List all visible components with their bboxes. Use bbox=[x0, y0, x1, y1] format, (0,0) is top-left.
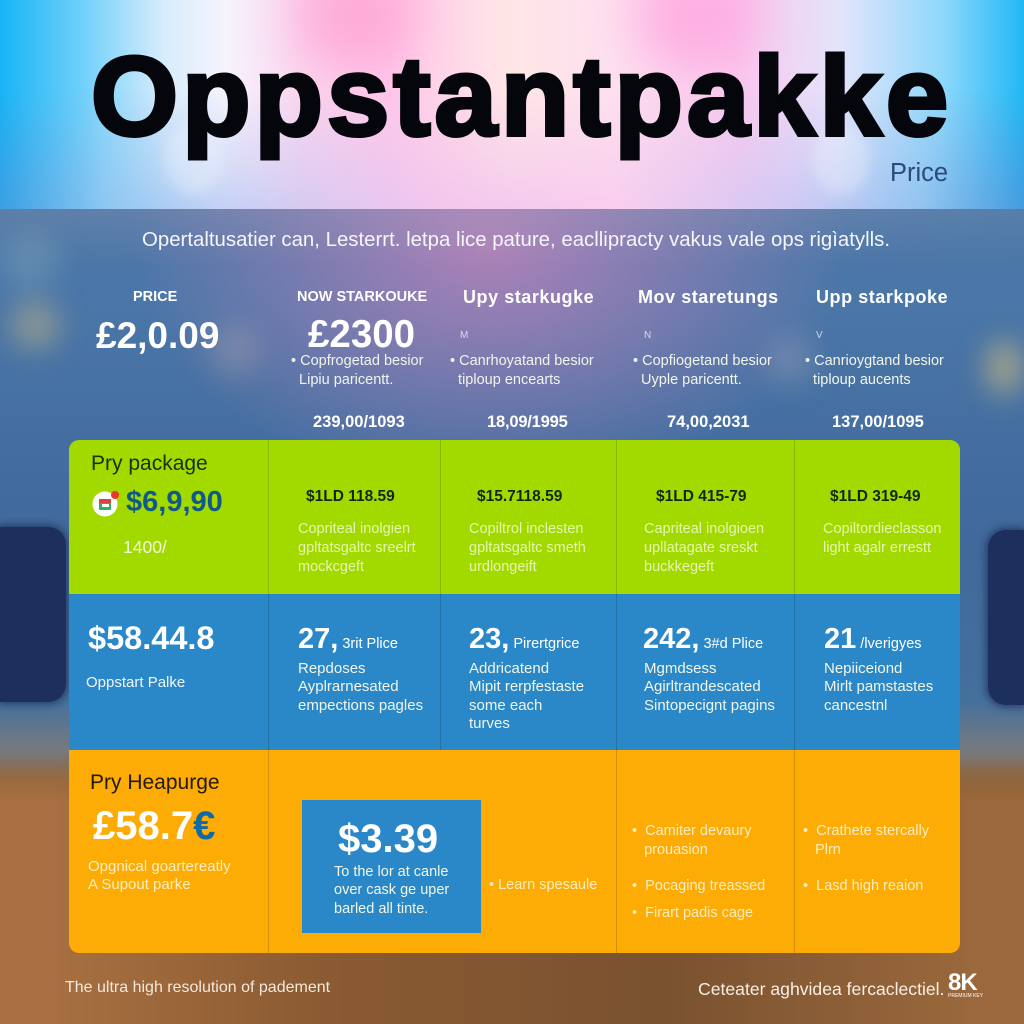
blue cell 1: 27, 3rit Plice bbox=[298, 623, 398, 655]
orange bullets: column 4: • Crathete stercally bbox=[803, 823, 929, 839]
column: price bbox=[96, 289, 219, 356]
blue cell 2: some each bbox=[469, 697, 542, 714]
green cell 3: $1LD 415-79 bbox=[656, 488, 746, 505]
header band bbox=[0, 0, 1024, 209]
callout: blue price box: $3.39 bbox=[338, 817, 438, 861]
green cell 2: gpltatsgaltc smeth bbox=[469, 540, 586, 556]
column: upy starkugke bbox=[450, 287, 594, 431]
callout: blue price box: barled all tinte. bbox=[334, 901, 428, 917]
blue cell 4: Mirlt pamstastes bbox=[824, 678, 933, 695]
blue cell 1: Ayplrarnesated bbox=[298, 678, 399, 695]
blue label cell: $58.44.8 bbox=[88, 620, 215, 656]
column: upp starkpoke: Upp starkpoke bbox=[816, 287, 948, 307]
blue cell 2: Addricatend bbox=[469, 660, 549, 677]
orange bullets: column 3: • Firart padis cage bbox=[632, 905, 753, 921]
blue cell 3: Agirltrandescated bbox=[644, 678, 761, 695]
green cell 3: Capriteal inolgioen bbox=[644, 521, 764, 537]
subtitle: price: Price bbox=[890, 159, 948, 187]
column: now starkouke bbox=[291, 289, 427, 431]
column: now starkouke: £2300 bbox=[308, 313, 415, 356]
blue cell 1: empections pagles bbox=[298, 697, 423, 714]
orange label cell: A Supout parke bbox=[88, 876, 191, 893]
green cell 1 bbox=[298, 488, 416, 575]
callout: blue price box bbox=[302, 800, 481, 933]
orange bullets: column 3: prouasion bbox=[644, 842, 708, 858]
green cell 4: $1LD 319-49 bbox=[830, 488, 920, 505]
column: now starkouke: NOW STARKOUKE bbox=[297, 289, 427, 305]
column: upp starkpoke: • Canrioygtand besior bbox=[805, 353, 944, 369]
column: price: PRICE bbox=[133, 289, 177, 305]
green cell 3 bbox=[644, 488, 764, 575]
column: upy starkugke: tiploup encearts bbox=[458, 372, 560, 388]
green label cell bbox=[91, 452, 223, 557]
green cell 2 bbox=[469, 488, 586, 575]
column: mov staretungs: 74,00,2031 bbox=[667, 413, 750, 431]
orange bullets: column 4: Plrn bbox=[815, 842, 841, 858]
column: upp starkpoke: 137,00/1095 bbox=[832, 413, 924, 431]
overlay on body top edge bbox=[0, 209, 1024, 248]
green cell 4: light agalr errestt bbox=[823, 540, 931, 556]
green cell 1: gpltatsgaltc sreelrt bbox=[298, 540, 416, 556]
intro sentence: Opertaltusatier can, Lesterrt. letpa lice pature, eacllipracty vakus vale ops rigìatylls. bbox=[142, 229, 890, 251]
row: green bbox=[69, 440, 960, 594]
blue cell 2: turves bbox=[469, 715, 510, 732]
orange bullets: column 3: • Camiter devaury bbox=[632, 823, 752, 839]
pricing table bbox=[69, 440, 960, 953]
blue cell 3: Mgmdsess bbox=[644, 660, 717, 677]
column: mov staretungs bbox=[633, 287, 779, 431]
orange bullets: column 3: • Pocaging treassed bbox=[632, 878, 765, 894]
orange label cell bbox=[88, 771, 231, 893]
green cell 3: upllatagate sreskt bbox=[644, 540, 758, 556]
pricing header row bbox=[96, 287, 948, 431]
green cell 4 bbox=[823, 488, 941, 556]
column: upy starkugke: M bbox=[460, 330, 468, 341]
orange bullets: column 4 bbox=[803, 823, 929, 894]
blue cell 1: Repdoses bbox=[298, 660, 366, 677]
title: Oppstantpakke bbox=[91, 34, 952, 159]
column: upp starkpoke: tiploup aucents bbox=[813, 372, 911, 388]
row: blue bbox=[69, 594, 960, 750]
green cell 1: mockcgeft bbox=[298, 559, 364, 575]
orange label cell: Pry Heapurge bbox=[90, 771, 220, 794]
green cell 4: Copiltordieclasson bbox=[823, 521, 941, 537]
background: blurred stage scene bbox=[0, 209, 1024, 1024]
blue cell 3: Sintopecignt pagins bbox=[644, 697, 775, 714]
column: now starkouke: 239,00/1093 bbox=[313, 413, 405, 431]
blue label cell: Oppstart Palke bbox=[86, 674, 185, 691]
green cell 2: $15.7118.59 bbox=[477, 488, 562, 505]
column: upy starkugke: • Canrhoyatand besior bbox=[450, 353, 594, 369]
green cell 2: urdlongeift bbox=[469, 559, 537, 575]
footer left text: The ultra high resolution of padement bbox=[65, 979, 330, 996]
row: orange bbox=[69, 750, 960, 953]
icon: badge bbox=[92, 491, 119, 516]
orange bullets: column 3 bbox=[632, 823, 765, 921]
column: upp starkpoke: V bbox=[816, 330, 823, 341]
blue cell 2: Mipit rerpfestaste bbox=[469, 678, 584, 695]
blue cell 4 bbox=[824, 623, 933, 714]
column: price: £2,0.09 bbox=[96, 315, 219, 356]
icon: 8K badge: PREMIUM KEY bbox=[948, 993, 983, 999]
blue cell 4: Nepiiceiond bbox=[824, 660, 902, 677]
column: upp starkpoke bbox=[805, 287, 948, 431]
green cell 3: buckkegeft bbox=[644, 559, 714, 575]
blue cell 2: 23, Pirertgrice bbox=[469, 623, 579, 655]
green cell 1: Copriteal inolgien bbox=[298, 521, 410, 537]
orange bullets: column 4: • Lasd high reaion bbox=[803, 878, 923, 894]
blue cell 3: 242, 3#d Plice bbox=[643, 623, 763, 655]
blue cell 4: 21 /lverigyes bbox=[824, 623, 922, 655]
blue cell 3 bbox=[643, 623, 775, 714]
column: now starkouke: • Copfrogetad besior bbox=[291, 353, 423, 369]
column: now starkouke: Lipiu paricentt. bbox=[299, 372, 393, 388]
orange label cell: Opgnical goartereatly bbox=[88, 858, 231, 875]
callout: blue price box: To the lor at canle bbox=[334, 864, 448, 880]
green label cell: 1400/ bbox=[123, 537, 167, 557]
green label cell: Pry package bbox=[91, 452, 208, 475]
column: mov staretungs: • Copfiogetand besior bbox=[633, 353, 772, 369]
green cell 1: $1LD 118.59 bbox=[306, 488, 395, 505]
blue cell 4: cancestnl bbox=[824, 697, 887, 714]
column: mov staretungs: Uyple paricentt. bbox=[641, 372, 742, 388]
column: upy starkugke: 18,09/1995 bbox=[487, 413, 568, 431]
callout: blue price box: over cask ge uper bbox=[334, 882, 449, 898]
blue label cell bbox=[86, 620, 215, 691]
blue cell 1 bbox=[298, 623, 423, 714]
orange bullet: middle: • Learn spesaule bbox=[489, 877, 597, 893]
icon: 8K badge: 8K bbox=[948, 969, 977, 996]
blue cell 2 bbox=[469, 623, 584, 732]
green label cell: $6,9,90 bbox=[126, 486, 223, 518]
column: upy starkugke: Upy starkugke bbox=[463, 287, 594, 307]
column: mov staretungs: N bbox=[644, 330, 651, 341]
column: mov staretungs: Mov staretungs bbox=[638, 287, 779, 307]
footer right text: Ceteater aghvidea fercaclectiel. bbox=[698, 979, 944, 999]
orange label cell: £58.7€ bbox=[93, 804, 215, 848]
green cell 2: Copiltrol inclesten bbox=[469, 521, 583, 537]
